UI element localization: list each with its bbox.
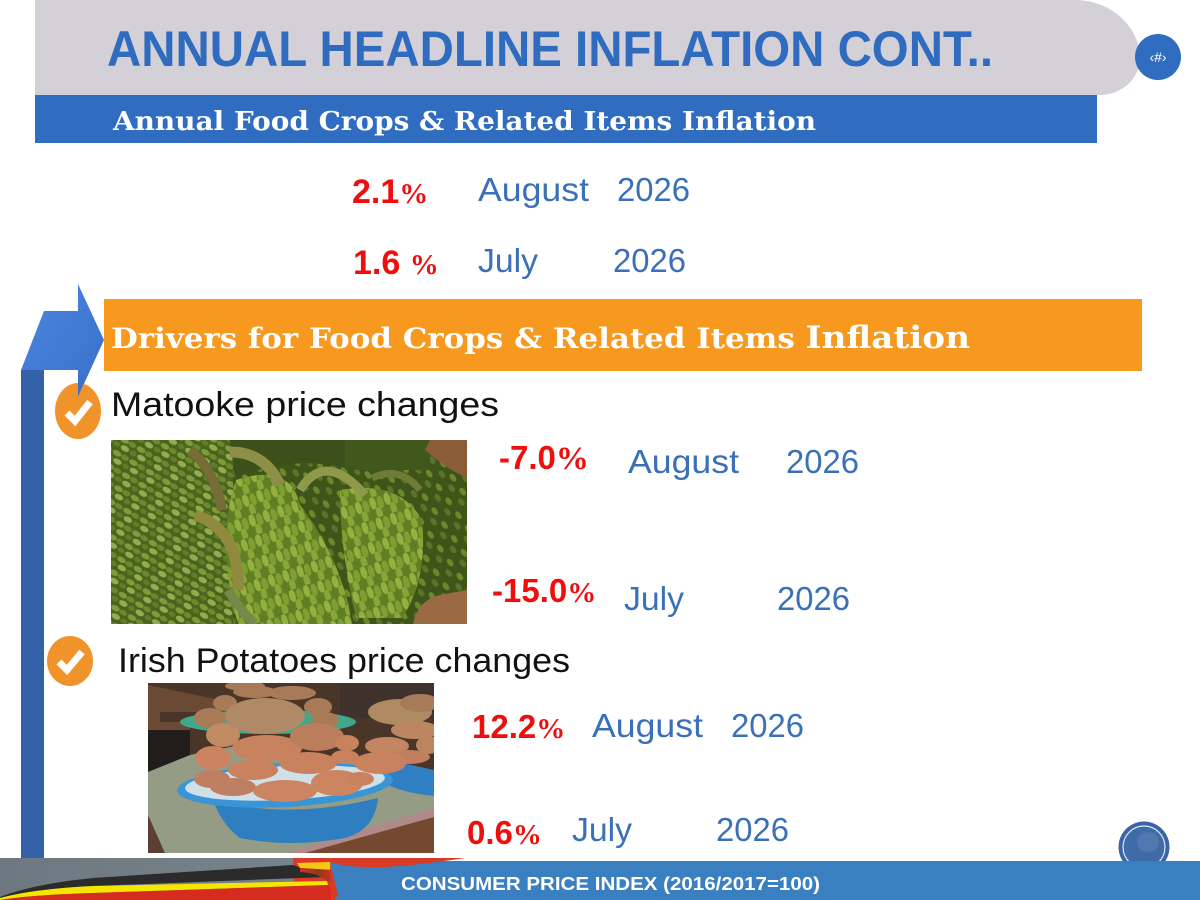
stat: potatoes July 2026: 2026: [716, 811, 789, 848]
stat: July 2026 headline food crops: July: [478, 242, 539, 279]
section heading: annual food crops: [35, 95, 1097, 143]
stat: potatoes July 2026: [467, 811, 789, 851]
stat: July 2026 headline food crops: 1.6 %: [353, 244, 439, 282]
stat: August 2026 headline food crops: [352, 171, 690, 211]
stat: matooke August 2026: [499, 439, 859, 480]
stat: August 2026 headline food crops: 2026: [617, 171, 690, 208]
stat: August 2026 headline food crops: August: [478, 171, 589, 208]
label: irish potatoes: Irish Potatoes price changes: [118, 642, 570, 680]
stat: potatoes August 2026: August: [592, 707, 703, 744]
stat: potatoes August 2026: 2026: [731, 707, 804, 744]
section heading: drivers: Drivers for Food Crops & Related Items Inflation: [111, 320, 970, 356]
slide number badge: ‹#›: [1149, 49, 1167, 65]
stat: July 2026 headline food crops: 2026: [613, 242, 686, 279]
icon: seal: [1118, 822, 1170, 861]
icon: check badge matooke: [55, 375, 101, 439]
footer text: CONSUMER PRICE INDEX (2016/2017=100): [401, 874, 820, 894]
stat: July 2026 headline food crops: [353, 242, 686, 282]
stat: matooke August 2026: 2026: [786, 443, 859, 480]
title: ANNUAL HEADLINE INFLATION CONT..: [107, 21, 993, 77]
slide number badge: [1135, 34, 1181, 80]
section heading: annual food crops: Annual Food Crops & Related Items Inflation: [112, 107, 816, 137]
stat: matooke July 2026: July: [624, 580, 685, 617]
stat: matooke August 2026: -7.0%: [499, 439, 589, 477]
arrow: bent up arrow pointing to drivers heading: [21, 284, 104, 861]
section heading: drivers: [104, 299, 1142, 371]
icon: check badge potatoes: [47, 636, 93, 686]
photo: irish potatoes: [148, 681, 440, 853]
footer band: [0, 858, 1200, 900]
stat: potatoes August 2026: 12.2%: [472, 708, 565, 745]
stat: August 2026 headline food crops: 2.1%: [352, 173, 428, 211]
stat: potatoes July 2026: July: [572, 811, 633, 848]
stat: potatoes August 2026: [472, 707, 804, 745]
stat: matooke July 2026: 2026: [777, 580, 850, 617]
stat: matooke July 2026: [492, 572, 850, 617]
label: matooke: Matooke price changes: [111, 386, 499, 424]
title banner: [35, 0, 1140, 95]
stat: matooke July 2026: -15.0%: [492, 572, 596, 609]
stat: potatoes July 2026: 0.6%: [467, 814, 542, 851]
stat: matooke August 2026: August: [628, 443, 739, 480]
photo: matooke bunches: [111, 440, 467, 624]
